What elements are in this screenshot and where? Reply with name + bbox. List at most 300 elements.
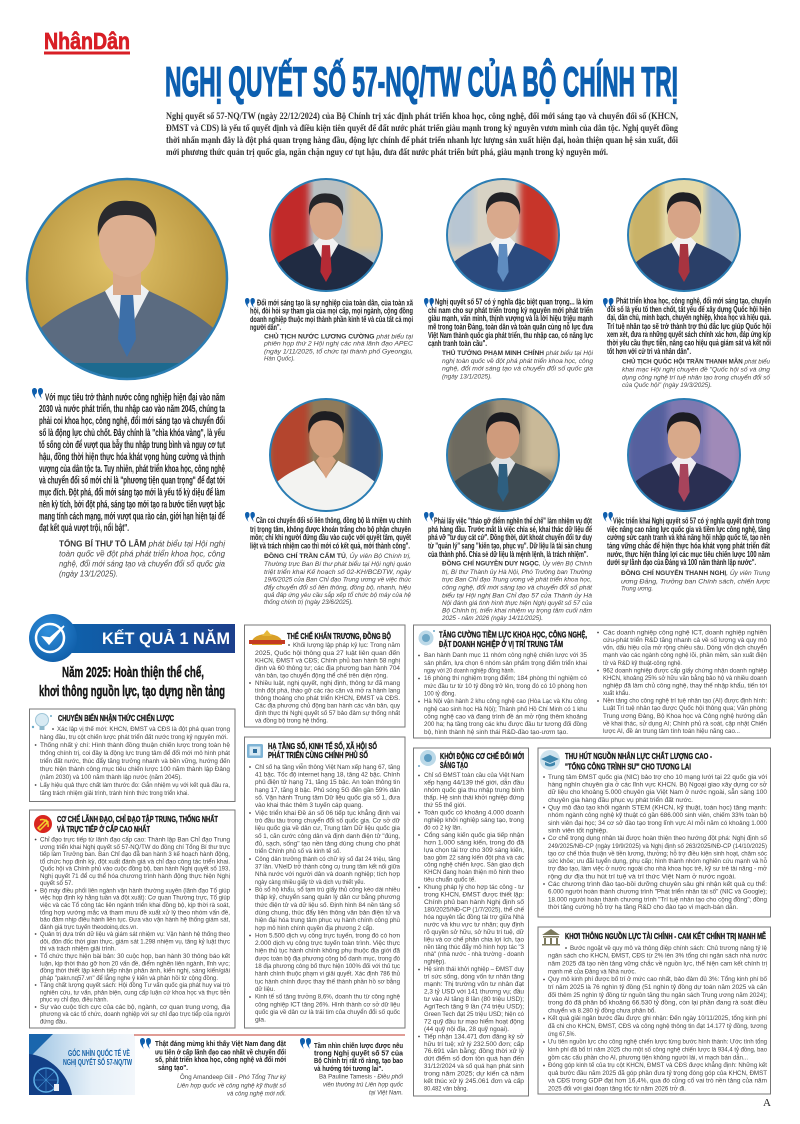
panel: science and technology potential: Ban hành Danh mục 11 nhóm công nghệ chiến lược với 35 <box>424 650 587 659</box>
panel: strategic awareness: thực hiện thành công mục tiêu chiến lược 100 năm thành lập Đảng <box>40 764 230 773</box>
quote: Nguyễn Duy Ngọc: Nội đánh giá tình hình thực hiện Nghị quyết số 57 của <box>442 599 592 607</box>
logo: Nhân Dân: NhânDân <box>44 28 130 54</box>
panel: innovation mechanism: xếp hạng 44/139 thế giới, dẫn đầu <box>424 778 524 787</box>
quote: Nguyễn Thanh Nghị: ĐỒNG CHÍ NGUYỄN THANH NGHỊ, Ủy viên Trung <box>621 567 770 577</box>
panel: innovation mechanism: KHCN đang hoàn thiện mô hình theo <box>424 869 524 876</box>
panel: financial resources: trí năm 2025 là 76 nghìn tỷ đồng (51 nghìn tỷ đồng dự toán năm 2025 và căn <box>548 982 767 991</box>
panel: innovation mechanism: nền tảng thúc đẩy mô hình hợp tác "3 <box>424 942 524 951</box>
panel: innovation mechanism: Hệ sinh thái khởi nghiệp – ĐMST duy <box>424 965 525 973</box>
quote: Tô Lâm: mục đích. Đột phá, đổi mới sáng tạo mới là yếu tố kỳ diệu để làm <box>39 487 225 499</box>
panel: innovation mechanism: 31/12/2024 và số quá hạn phát sinh <box>424 1061 524 1070</box>
panel: science and technology potential: 100 tỷ đồng. <box>424 689 456 698</box>
quote: Nguyễn Duy Ngọc: Phải lấy việc "tháo gỡ điểm nghẽn thể chế" làm nhiệm vụ đột <box>434 516 592 526</box>
quote: Trần Cẩm Tú: triệt triển khai Kế hoạch số 02-KH/BCĐTW, ngày <box>264 568 412 576</box>
quote: Amandeep Gill: Liên hợp quốc về công nghệ kỹ thuật số <box>177 1080 287 1089</box>
panel: innovation mechanism: hữu trí tuệ; xử lý 232.500 đơn; cấp <box>424 1039 524 1048</box>
panel: innovation mechanism: 2,3 tỷ USD với 141 thương vụ; đầu <box>424 986 524 996</box>
panel: digital infrastructure: thập kỷ, chuyển sang quản lý dân cư bằng phương <box>255 892 400 901</box>
panel: institutions <box>244 625 405 727</box>
panel: strategic awareness: CHUYỂN BIẾN NHẬN THỨC CHIẾN LƯỢC <box>58 712 174 723</box>
panel: institutions: THỂ CHẾ KHẨN TRƯƠNG, ĐỒNG BỘ <box>287 630 391 641</box>
panel: leadership mechanism: phương và các tổ chức, doanh nghiệp với sự chỉ đạo trực tiếp của người <box>40 1009 230 1018</box>
intro text: thời nhấn mạnh đây là đột phá quan trọng hàng đầu, động lực chính để phát triển nhanh lực lượng sản xuất hiện đại, hoàn thiện quan hệ sản xuất, đổi <box>166 135 678 146</box>
icon: gold drum emblem <box>249 630 285 645</box>
panel: digital infrastructure: công nghiệp ICT tăng 26%. Hình thành cơ sở dữ liệu <box>255 1000 400 1008</box>
quote: Nguyễn Duy Ngọc: 2025 - năm 2026 (ngày 14/11/2025). <box>441 615 543 622</box>
quote: Amandeep Gill: sáng tạo". <box>158 1063 188 1072</box>
panel: high-quality human resources: sức khỏe; ưu đãi tuyển dụng, phụ cấp; hình thành nhóm nghiên cứu mạnh và hỗ <box>548 856 767 865</box>
quote: Amandeep Gill: số, phát triển khoa học, công nghệ và đổi mới <box>155 1055 286 1064</box>
panel: digital infrastructure: gia. <box>255 1017 266 1024</box>
panel: digital infrastructure: dùng chung, thúc đẩy liên thông văn bản điện tử và <box>255 908 400 916</box>
panel: digital infrastructure: ngày càng nhiều giấy tờ và dịch vụ thiết yếu. <box>255 877 365 886</box>
panel: leadership mechanism: luận, kịp thời tháo gỡ hơn 20 vấn đề, điểm nghẽn liên ngành, lĩnh vực; <box>40 958 230 967</box>
panel: leadership mechanism: Quốc hội và Chính phủ vào cuộc đồng bộ, ban hành Nghị quyết số 193, <box>40 864 230 873</box>
quote: Trần Cẩm Tú: thống chính trị (ngày 23/6/2025). <box>264 598 353 606</box>
quote: Lương Cường: phiên họp thứ 2 Hội nghị các nhà lãnh đạo APEC <box>263 341 413 348</box>
panel: financial resources: năm 2025 đã tạo nền tảng vững chắc về nguồn lực, thể hiện cam kết chính trị <box>548 958 768 968</box>
panel: digital infrastructure: đủ, sạch, sống" tạo nền tảng dùng chung cho phát <box>255 838 400 848</box>
quote: Nguyễn Duy Ngọc: từ "quản lý" sang "kiến tạo, phục vụ". Dữ liệu là tài sản chung <box>428 542 592 550</box>
quote: Nguyễn Duy Ngọc <box>424 512 593 622</box>
panel: science and technology potential: ngay với 20 doanh nghiệp đồng hành. <box>424 666 515 674</box>
panel: financial resources: Kết quả giải ngân bước đầu được ghi nhận: Đến ngày 10/11/2025, tổng kinh phí <box>548 1013 767 1022</box>
panel: digital infrastructure: tục hành chính được thay thế thành phần hồ sơ bằng <box>255 976 400 985</box>
panel: science and technology potential: công nghệ cao và đang trình đề án mở rộng thêm khoảng <box>424 712 587 721</box>
panel: innovation mechanism: dứt điểm số đơn tồn quá hạn đến <box>424 1054 524 1063</box>
quote: Nguyễn Duy Ngọc: phá vỡ "tư duy cát cứ". Đồng thời, dứt khoát chuyển đổi tư duy <box>428 532 592 542</box>
panel: financial resources: 2025 đối với giai đoạn tăng tốc từ năm 2026 trở đi. <box>548 1084 686 1092</box>
panel: financial resources: ứng 67,5%. <box>548 1031 576 1038</box>
panel: leadership mechanism: VÀ TRỰC TIẾP Ở CẤP CAO NHẤT <box>57 823 150 834</box>
quote: Nguyễn Duy Ngọc: trị, Bí thư Thành ủy Hà Nội, Phó Trưởng ban Thường <box>442 568 592 576</box>
panel: science and technology potential: TĂNG CƯỜNG TIỀM LỰC KHOA HỌC, CÔNG NGHỆ, <box>439 628 587 640</box>
panel: strategic awareness <box>30 709 235 802</box>
quote: Phạm Minh Chính: cạnh tranh toàn cầu". <box>428 339 487 348</box>
panel: high-quality human resources: Các chương trình đào tạo-bồi dưỡng chuyên sâu ghi nhận kết quả cụ thể: <box>548 879 767 888</box>
panel: leadership mechanism: việc và các Tổ công tác liên ngành triển khai đồng bộ, kịp thời rà soát, <box>40 900 230 909</box>
panel: institutions: 2025, Quốc hội thông qua 27 luật liên quan đến <box>255 648 400 657</box>
panel: leadership mechanism: Tăng chất lượng quyết sách: Hội đồng Tư vấn quốc gia phát huy vai trò <box>40 980 230 989</box>
panel: financial resources: Bước ngoặt về quy mô và thông điệp chính sách: Chủ trương nâng tỷ lệ <box>570 943 767 952</box>
quote: Trần Thanh Mẫn: tốt hơn với cử tri và nhân dân". <box>607 347 691 356</box>
quote: Pauline Tamesis: Bộ Chính trị rất rõ ràng, tạo bao <box>314 1056 403 1065</box>
panel: science and technology potential: về khai thác, sử dụng AI; Chính phủ rà soát, cập nhật Chiến <box>603 718 767 727</box>
quote: Trần Thanh Mẫn: dụng công nghệ trí tuệ nhân tạo trong chuyển đổi số <box>622 373 771 381</box>
page letter: A <box>763 1097 771 1109</box>
icon: bank building <box>542 929 560 946</box>
panel: innovation mechanism: thứ 55 thế giới. <box>424 800 466 809</box>
panel: digital infrastructure: liệu quốc gia về dân cư, Trung tâm Dữ liệu quốc gia <box>255 823 400 832</box>
icon: quote mark <box>300 1038 311 1049</box>
panel: leadership mechanism: tổ chức họp định kỳ, đột xuất đánh giá và chỉ đạo công tác triển khai. <box>40 856 230 865</box>
panel: science and technology potential <box>414 625 770 738</box>
quote: Tô Lâm: vượng của dân tộc ta. Tuy nhiên, phát triển khoa học, công nghệ <box>39 463 225 475</box>
panel: science and technology potential: nghệ cao sinh học Hà Nội); Thành phố Hồ Chí Minh có 1 khu <box>424 704 587 713</box>
quote: Phạm Minh Chính: nghị toàn quốc về đột phá phát triển khoa học, công <box>442 356 593 365</box>
panel: science and technology potential: 200 ha; hạ tầng trong các khu được đầu tư tương đối đồng <box>424 719 587 728</box>
panel: high-quality human resources: Quy mô đào tạo khối ngành STEM (KHCN, kỹ thuật, toán học) tăng mạnh: <box>548 802 767 812</box>
panel: digital infrastructure: Hơn 5.500 dịch vụ công trực tuyến, trong đó có hơn <box>255 930 400 939</box>
panel: leadership mechanism: CƠ CHẾ LÃNH ĐẠO, CHỈ ĐẠO TẬP TRUNG, THỐNG NHẤT <box>57 813 219 824</box>
quote: Tô Lâm: nghệ, đổi mới sáng tạo và chuyển đổi số quốc gia <box>59 558 225 568</box>
panel: science and technology potential: mạnh vào các ngành công nghệ lõi, phần mềm, sản xuất điện <box>603 650 767 659</box>
panel: digital infrastructure: dữ liệu. <box>255 986 275 993</box>
panel: high-quality human resources: tạo cơ chế thỏa thuận về tiền lương, thưởng; hỗ trợ điều kiện sinh hoạt, chăm sóc <box>548 848 768 857</box>
panel: digital infrastructure: Kinh tế số tăng trưởng 8,6%, doanh thu từ công nghệ <box>255 992 400 1001</box>
quote: Lương Cường: người dân". <box>250 323 281 332</box>
panel: innovation mechanism: KHỞI ĐỘNG CƠ CHẾ ĐỔI MỚI <box>440 750 524 761</box>
panel: high-quality human resources: chuyên gia hàng đầu phục vụ phát triển đất nước. <box>548 795 693 804</box>
panel: strategic awareness: tăng trách nhiệm giải trình, tránh hình thức trong triển khai. <box>40 789 189 797</box>
quote: Nguyễn Duy Ngọc: biểu tại Hội nghị Ban Chỉ đạo 57 của Thành ủy Hà <box>442 591 592 599</box>
quote: Tô Lâm: (ngày 13/1/2025). <box>59 568 118 578</box>
quote: Lương Cường: (ngày 1/11/2025, tổ chức tại thành phố Gyeongju, <box>264 347 413 355</box>
panel: science and technology potential: sản phẩm, lựa chọn 6 nhóm sản phẩm trọng điểm triển khai <box>424 659 587 667</box>
quote: Tô Lâm: Với mục tiêu trở thành nước công nghiệp hiện đại vào năm <box>45 392 225 404</box>
panel: innovation mechanism: nước và khu vực tư nhân; quy định <box>424 921 524 928</box>
icon: innovation gear <box>418 750 436 767</box>
panel: strategic awareness: thống chính trị, coi đây là động lực trung tâm để đổi mới mô hình phát <box>40 748 230 757</box>
panel: science and technology potential: 16 phòng thí nghiệm trọng điểm; 184 phòng thí nghiệm có <box>424 674 587 682</box>
intro text: mới phương thức quản trị quốc gia, ngăn chặn nguy cơ tụt hậu, đưa đất nước phát triển bứt phá, giàu mạnh trong kỷ nguyên mới. <box>166 147 608 158</box>
icon: quote mark <box>603 298 613 308</box>
panel: financial resources: Quy mô kinh phí được bố trí ở mức cao nhất, bảo đảm đủ 3%: Tổng kinh phí bố <box>548 974 767 983</box>
icon: quote mark <box>245 298 255 308</box>
quote: Amandeep Gill: ưu tiên ở cấp lãnh đạo cao nhất về chuyển đổi <box>155 1047 286 1056</box>
quote: Trần Cẩm Tú <box>245 512 412 606</box>
quote: Tô Lâm: và chuyển đổi số mới chỉ là "phương tiện quan trọng" để đạt tới <box>39 475 225 487</box>
quote: Trần Cẩm Tú: 19/6/2025 của Ban Chỉ đạo Trung ương về việc thúc <box>264 575 412 584</box>
panel: high-quality human resources <box>538 748 770 917</box>
panel: financial resources: đối thêm 25 nghìn tỷ đồng từ nguồn tăng thu ngân sách Trung ương năm 2024); <box>548 990 767 999</box>
panel: innovation mechanism: đó có 2 kỳ lân. <box>424 824 462 831</box>
panel: high-quality human resources: hàng nghìn chuyên gia ở các lĩnh vực KHCN. Bộ Ngoại giao xây dựng cơ sở <box>548 781 768 789</box>
panel: innovation mechanism: trong năm 2025; dự kiến cả năm <box>424 1069 525 1078</box>
panel: digital infrastructure: hợp mô hình chính quyền địa phương 2 cấp. <box>255 923 374 932</box>
quote: Trần Cẩm Tú: Cần coi chuyển đổi số liên thông, đồng bộ là nhiệm vụ chính <box>256 515 411 525</box>
quote: Trần Cẩm Tú: liệt và trách nhiệm cao thì mới có kết quả, mới thành công". <box>250 542 410 550</box>
panel: digital infrastructure: số 1, căn cước công dân và định danh điện tử "đúng, <box>255 831 400 840</box>
icon: quote mark <box>424 512 434 522</box>
icon: digital screen <box>247 744 263 758</box>
panel: digital infrastructure: trò đầu tàu trong chuyển đổi số quốc gia. Cơ sở dữ <box>255 816 401 824</box>
panel: leadership mechanism: Tổ chức thực hiện bài bản: 30 cuộc họp, ban hành 30 thông báo kết <box>40 951 230 960</box>
panel: innovation mechanism: liệu và cơ chế phân chia lợi ích, tạo <box>424 934 524 943</box>
panel: digital infrastructure: HẠ TẦNG SỐ, KINH TẾ SỐ, XÃ HỘI SỐ <box>268 740 377 751</box>
quote: Nguyễn Duy Ngọc: phá hàng đầu. Trước mắt là việc chia sẻ, khai thác dữ liệu để <box>428 523 592 534</box>
panel: leadership mechanism: bảo đảm nhịp điều hành liên tục. Đưa vào vận hành hệ thống giám sát, <box>40 915 230 924</box>
quote: Trần Thanh Mẫn: của Quốc hội" (ngày 19/3/2025). <box>622 381 712 389</box>
panel: science and technology potential: Nền tảng cho công nghệ trí tuệ nhân tạo (AI) được định hình: <box>603 696 767 705</box>
quote: Trần Cẩm Tú: đẩy chuyển đổi số liên thông, đồng bộ, nhanh, hiệu <box>264 583 411 592</box>
quote: Tô Lâm: tố sống còn để vượt qua bẫy thu nhập trung bình và nguy cơ tụt <box>39 438 225 451</box>
panel: innovation mechanism: công nghệ chiến lược. Sàn giao dịch <box>424 860 524 869</box>
divider line <box>134 1034 405 1036</box>
panel: science and technology potential: bộ, hình thành hệ sinh thái R&D-đào tạo-ươm tạo. <box>424 729 568 736</box>
panel: leadership mechanism: đồng thời thiết lập kênh tiếp nhận phản ánh, kiến nghị, sáng kiến/giải <box>40 966 231 974</box>
panel: high-quality human resources: 18.000 người hoàn thành chương trình "Trí tuệ nhân tạo cho cộng đồng"; đồng <box>548 894 767 903</box>
panel: innovation mechanism: rõ quyền sở hữu, sở hữu trí tuệ, dữ <box>424 927 525 936</box>
quote: Pauline Tamesis: và hướng tới tương lai". <box>314 1064 383 1073</box>
icon: quote mark <box>32 388 43 399</box>
panel: leadership mechanism <box>30 810 235 1028</box>
panel: digital infrastructure: 41 bậc. Tốc độ internet hạng 18, tăng 42 bậc. Chính <box>255 770 400 779</box>
panel: digital infrastructure: thức điện tử và dữ liệu số. Định hình 84 nền tảng số <box>255 900 400 909</box>
quote: Phạm Minh Chính: Nghị quyết số 57 có ý nghĩa đặc biệt quan trọng... là kim <box>435 298 593 306</box>
panel: science and technology potential: Hà Nội vận hành 2 khu công nghệ cao (Hòa Lạc và Khu công <box>424 698 587 705</box>
quote: Trần Thanh Mẫn: CHỦ TỊCH QUỐC HỘI TRẦN THANH MẪN phát biểu <box>622 356 770 366</box>
panel: digital infrastructure: Chỉ số hạ tầng viễn thông Việt Nam xếp hạng 67, tăng <box>255 762 400 771</box>
panel: innovation mechanism: (44 quỹ nội địa, 28 quỹ ngoại). <box>424 1026 509 1033</box>
panel: financial resources: Đóng góp kinh tế của trụ cột KHCN, ĐMST và CĐS được khẳng định: Những kết <box>548 1060 767 1069</box>
quote: Lương Cường: doanh nghiệp thuộc mọi thành phần kinh tế và của tất cả mọi <box>250 315 413 324</box>
panel: innovation mechanism: nghiệp khởi nghiệp sáng tạo, trong <box>424 816 524 824</box>
panel: leadership mechanism: pháp "pakn.nq57.vn" để lắng nghe ý kiến và phản hồi từ cộng đồng. <box>40 973 218 982</box>
panel: digital infrastructure: Nhà nước với người dân và doanh nghiệp; tích hợp <box>255 871 400 878</box>
quote: Phạm Minh Chính: chỉ nam cho sự phát triển trong kỷ nguyên mới phát triển <box>428 305 593 315</box>
panel: digital infrastructure: PHÁT TRIỂN CÙNG CHÍNH PHỦ SỐ <box>268 749 368 760</box>
panel: institutions: văn bản, tạo chuyển động thể chế trên diện rộng. <box>255 670 388 679</box>
quote: Lương Cường <box>245 298 413 363</box>
panel: digital infrastructure: hiện thủ tục hành chính không phụ thuộc địa giới đã <box>255 947 400 955</box>
quote: Trần Cẩm Tú: ĐỒNG CHÍ TRẦN CẨM TÚ, Ủy viên Bộ Chính trị, <box>264 550 411 560</box>
portrait: Nguyễn Thanh Nghị <box>628 399 740 511</box>
panel: institutions: Khối lượng lập pháp kỷ lục: Trong năm <box>293 640 400 649</box>
quote: Tô Lâm: số là động lực chủ chốt. Đây chính là "chìa khóa vàng", là yếu <box>39 427 225 439</box>
panel: strategic awareness: Xác lập vị thế mới: KHCN, ĐMST và CĐS là đột phá quan trọng <box>57 724 230 733</box>
quote: Amandeep Gill <box>140 1038 287 1098</box>
panel: international view banner: NGHỊ QUYẾT SỐ 57-NQ/TW <box>63 1057 132 1067</box>
panel: innovation mechanism: mạnh: Thị trường vốn tư nhân đạt <box>424 979 524 988</box>
panel: institutions: Nhiều luật, nghị quyết, nghị định, thông tư đã mang <box>255 678 400 687</box>
panel: innovation mechanism: 76.691 văn bằng; đồng thời xử lý <box>424 1046 525 1055</box>
quote: Pauline Tamesis: trong Nghị quyết số 57 của <box>314 1048 404 1058</box>
panel: innovation mechanism: SÁNG TẠO <box>440 760 468 770</box>
quote: Phạm Minh Chính <box>424 298 593 380</box>
quote: Nguyễn Duy Ngọc: ĐỒNG CHÍ NGUYỄN DUY NGỌC, Ủy viên Bộ Chính <box>442 558 592 568</box>
quote: Phạm Minh Chính: mẽ trong toàn Đảng, toàn dân và toàn quân cùng nỗ lực đưa <box>428 322 593 332</box>
panel: leadership mechanism: dõi, đôn đốc thời gian thực, giám sát 1.298 nhiệm vụ, tăng kỷ luật thực <box>40 936 231 945</box>
panel: innovation mechanism: trong KHCN, ĐMST được thiết lập: <box>424 890 524 899</box>
panel: digital infrastructure: 2.000 dịch vụ công trực tuyến toàn trình. Việc thực <box>255 938 401 947</box>
panel: financial resources: ngân sách cho KHCN, ĐMST, CĐS từ 2% lên 3% tổng chi ngân sách nhà nước <box>548 952 768 960</box>
intro text: ĐMST và CDS) là yếu tố quyết định và điều kiện tiên quyết để đất nước phát triển giàu mạnh trong kỷ nguyên vươn mình của dân tộc. Nghị quyết đồng <box>166 123 678 134</box>
panel: leadership mechanism: quyết số 57. <box>40 878 73 887</box>
icon: light bulb <box>32 714 52 730</box>
panel: high-quality human resources: Cơ chế trọng dụng nhân tài được hoàn thiện theo hướng đột phá: Nghị định số <box>548 833 767 842</box>
panel: innovation mechanism: hóa nguyên tắc đồng tài trợ giữa Nhà <box>424 912 524 921</box>
panel: digital infrastructure: số. Vận hành Trung tâm Dữ liệu quốc gia số 1, đưa <box>255 792 400 802</box>
panel: innovation mechanism: nhóm quốc gia thu nhập trung bình <box>424 785 524 794</box>
panel: science and technology potential: Các doanh nghiệp công nghệ ICT, doanh nghiệp nghiên <box>603 630 767 636</box>
subheading: khơi thông nguồn lực, tạo dựng nền tảng <box>39 683 225 700</box>
quote: Nguyễn Thanh Nghị: ương Đảng, Trưởng ban Chính sách, chiến lược <box>621 577 771 585</box>
panel: science and technology potential: lược AI, đề án trung tâm tính toán hiệu năng cao... <box>603 726 740 735</box>
panel: high-quality human resources: trợ đào tạo, làm việc ở nước ngoài cho nhà khoa học trẻ, kỹ sư trẻ tài năng - mở <box>548 865 768 873</box>
panel: digital infrastructure: hạng 17, tăng 8 bậc. Phủ sóng 5G đến gần 59% dân <box>255 785 400 794</box>
subheading <box>39 664 225 700</box>
portrait: Trần Thanh Mẫn <box>628 179 740 291</box>
panel: digital infrastructure: hiện đại hóa trung tâm phục vụ hành chính công phù <box>255 917 400 924</box>
portrait: Lương Cường <box>270 179 382 291</box>
panel: innovation mechanism: AgriTech tăng 9 lần (74 triệu USD); <box>424 1002 524 1010</box>
icon: quote mark <box>603 512 613 522</box>
quote: Phạm Minh Chính: (ngày 13/1/2025). <box>442 373 492 380</box>
quote: Tô Lâm <box>32 388 226 578</box>
panel: high-quality human resources: Trung tâm ĐMST quốc gia (NIC) bảo trợ cho 10 mạng lưới tại 22 quốc gia với <box>548 772 768 781</box>
quote: Pauline Tamesis: tại Việt Nam. <box>369 1089 403 1096</box>
panel: high-quality human resources: 6.000 người hoàn thành chương trình "Phát triển nhân tài số" (NIC và Google); <box>548 887 767 896</box>
panel: high-quality human resources: 249/2025/NĐ-CP (ngày 19/9/2025) và Nghị định số 263/2025/NĐ-CP (14/10/2025) <box>548 841 767 850</box>
panel: leadership mechanism: thi và trách nhiệm giải trình. <box>40 946 116 953</box>
quote: Pauline Tamesis: Bà Pauline Tamesis - Điều phối <box>319 1072 403 1081</box>
quote: Trần Thanh Mẫn <box>603 296 771 389</box>
panel: leadership mechanism: việc họp định kỳ hằng tuần và đột xuất): Cơ quan Thường trực, Tổ giúp <box>40 893 230 902</box>
panel: science and technology potential: xuất khẩu. <box>603 688 630 697</box>
panel: leadership mechanism: đánh giá trực tuyến theodoinq.dcs.vn. <box>40 922 138 931</box>
quote: Tô Lâm: hậu, đồng thời hiện thực hóa khát vọng hùng cường và thịnh <box>39 451 225 463</box>
panel: high-quality human resources: sinh viên tốt nghiệp. <box>548 826 608 834</box>
panel: strategic awareness: (năm 2030) và 100 năm thành lập nước (năm 2045). <box>40 774 182 781</box>
panel: international view banner: GÓC NHÌN QUỐC TẾ VỀ <box>68 1048 130 1058</box>
icon: graduation cap <box>540 750 560 770</box>
panel: innovation mechanism: thấp. Hệ sinh thái khởi nghiệp đứng <box>424 793 524 802</box>
panel: innovation mechanism: Cổng sáng kiến quốc gia tiếp nhận <box>424 830 524 839</box>
quote: Nguyễn Thanh Nghị: Trung ương. <box>621 586 653 593</box>
panel: innovation mechanism: nghiệp). <box>424 959 446 966</box>
quote: Tô Lâm: TỔNG BÍ THƯ TÔ LÂM phát biểu tại Hội nghị <box>59 538 226 548</box>
panel: high-quality human resources: "TỔNG CÔNG TRÌNH SƯ" CHO TƯƠNG LAI <box>565 760 691 772</box>
quote: Lương Cường: CHỦ TỊCH NƯỚC LƯƠNG CƯỜNG phát biểu tại <box>264 331 413 340</box>
quote: Pauline Tamesis <box>300 1038 404 1096</box>
panel: strategic awareness: Thống nhất ý chí: Hình thành đồng thuận chiến lược trong toàn hệ <box>40 740 230 749</box>
panel: financial resources: chuyển và 8.280 tỷ đồng chưa phân bổ. <box>548 1005 656 1014</box>
quote: Trần Cẩm Tú: quả đáp ứng yêu cầu sắp xếp tổ chức bộ máy của hệ <box>264 590 411 599</box>
panel: digital infrastructure: vào khai thác thêm 3 tuyến cáp quang. <box>255 800 363 809</box>
quote: Tô Lâm: mang tính cách mạng, mới vượt qua rào cản, giới hạn hiện tại để <box>39 510 225 522</box>
panel: digital infrastructure: 37 lần. VNeID trở thành công cụ trung tâm kết nối giữa <box>255 862 400 870</box>
panel: leadership mechanism: đứng đầu. <box>40 1016 67 1026</box>
quote: Tô Lâm: 2030 và nước phát triển, thu nhập cao vào năm 2045, chúng ta <box>39 403 225 415</box>
quote: Tô Lâm: toàn quốc về đột phá phát triển khoa học, công <box>59 548 225 558</box>
panel: innovation mechanism: tiêu chuẩn quốc tế. <box>424 875 476 884</box>
panel: science and technology potential: 962 doanh nghiệp được cấp giấy chứng nhận doanh nghiệp <box>603 665 767 674</box>
panel: high-quality human resources: sinh viên đại học; 34 cơ sở đào tạo trong lĩnh vực AI mỗi năm có khoảng 1.000 <box>548 818 767 827</box>
panel: financial resources: Ưu tiên nguồn lực cho công nghệ chiến lược từng bước hình thành: Ước tính tổng <box>548 1037 767 1046</box>
panel: innovation mechanism: Chính phủ ban hành Nghị định số <box>424 897 524 906</box>
intro text <box>166 111 678 158</box>
panel: digital infrastructure: Việc triển khai Đề án số 06 tiếp tục khẳng định vai <box>255 808 401 817</box>
panel: leadership mechanism: Chỉ đạo trực tiếp từ lãnh đạo cấp cao: Thành lập Ban Chỉ đạo Trung <box>40 834 230 844</box>
quote: Amandeep Gill: và công nghệ mới nổi. <box>227 1090 286 1098</box>
panel: science and technology potential: Trung ương Đảng, Bộ Khoa học và Công nghệ hướng dẫn <box>603 711 767 720</box>
panel: leadership mechanism: Quản trị dựa trên dữ liệu và giám sát nhiệm vụ: Vận hành hệ thống theo <box>40 929 230 938</box>
panel: innovation mechanism: 80.482 văn bằng. <box>424 1084 468 1092</box>
panel: leadership mechanism: Sự vào cuộc tích cực của các bộ, ngành, cơ quan trung ương, địa <box>40 1003 230 1011</box>
panel: science and technology potential: Luật Trí tuệ nhân tạo được Quốc hội thông qua; Văn phòng <box>603 703 767 712</box>
panel: high-quality human resources: thời tăng cường hỗ trợ hạ tầng R&D cho đào tạo vi mạch-bán dẫn. <box>548 902 738 911</box>
panel: financial resources: quả bước đầu năm 2025 đã góp phần đưa tỷ trọng đóng góp của KHCN, ĐMST <box>548 1068 767 1077</box>
quote: Nguyễn Duy Ngọc: Bộ Chính trị, triển khai nhiệm vụ trọng tâm cuối năm <box>442 607 592 615</box>
panel: digital infrastructure: triển Chính phủ số và kinh tế số. <box>255 846 341 855</box>
panel: high-quality human resources: rộng dư địa thu hút trí tuệ và trí thức Việt Nam ở nước ngoài. <box>548 872 736 880</box>
panel: strategic awareness: triển đất nước, thúc đẩy tăng trưởng nhanh và bền vững, hướng đến <box>40 756 230 765</box>
panel: digital infrastructure <box>244 737 405 1028</box>
quote: Lương Cường: Hàn Quốc). <box>264 355 295 363</box>
icon: quote mark <box>245 512 255 522</box>
panel: science and technology potential: KHCN, khoảng 25% sở hữu văn bằng bảo hộ và nhiều doanh <box>603 673 767 682</box>
panel: high-quality human resources: dữ liệu cho khoảng 5.000 chuyên gia Việt Nam ở nước ngoài, sẵn sàng 100 <box>548 787 767 796</box>
panel: financial resources: trong đó đã phân bổ khoảng 66.530 tỷ đồng, còn lại phần đang rà soát điều <box>548 998 767 1007</box>
icon: quote mark <box>140 1038 151 1049</box>
panel: leadership mechanism: ương triển khai Nghị quyết số 57-NQ/TW do đồng chí Tổng Bí thư trực <box>40 842 231 851</box>
panel: strategic awareness: hàng đầu, trụ cột chiến lược phát triển đất nước trong kỷ nguyên mới. <box>40 732 228 741</box>
panel: innovation mechanism: nhà" (nhà nước - nhà trường - doanh <box>424 951 524 958</box>
quote: Nguyễn Duy Ngọc: công nghệ, đổi mới sáng tạo và chuyển đổi số phát <box>442 584 593 592</box>
panel: digital infrastructure: Công dân trưởng thành có chữ ký số đạt 24 triệu, tăng <box>255 854 400 863</box>
quote: Lương Cường: hội, đòi hỏi sự tham gia của mọi cấp, mọi ngành, cộng đồng <box>250 306 413 316</box>
intro text: Nghị quyết số 57-NQ/TW (ngày 22/12/2024) của Bộ Chính trị xác định phát triển khoa học, công nghệ, đổi mới sáng tạo và chuyển đổi số (KHCN, <box>166 111 678 122</box>
panel: digital infrastructure: hành chính thuộc phạm vi giải quyết. Xác định 786 thủ <box>255 969 400 978</box>
panel: innovation mechanism: 72 quỹ đầu tư mạo hiểm hoạt động <box>424 1016 524 1025</box>
panel: international view banner <box>29 1034 135 1095</box>
panel: leadership mechanism: Nghị quyết 71 để cụ thể hóa chương trình hành động thực hiện Nghị <box>40 871 230 880</box>
panel: institutions: tính đột phá, tháo gỡ các rào cản và mở ra hành lang <box>255 686 400 694</box>
portrait: Tô Lâm <box>27 179 227 383</box>
panel: innovation mechanism: Khung pháp lý cho hợp tác công - tư <box>424 884 525 891</box>
quote: Phạm Minh Chính: giàu mạnh, văn minh, thịnh vượng và là lời hiệu triệu mạnh <box>428 314 593 323</box>
panel: science and technology potential: nghiệp đã làm chủ công nghệ, thay thế nhập khẩu, tiến tới <box>603 680 768 690</box>
quote: Trần Cẩm Tú: môn; chỉ khi người đứng đầu vào cuộc với quyết tâm, quyết <box>250 533 411 542</box>
portrait: Phạm Minh Chính <box>447 179 559 291</box>
quote: Nguyễn Duy Ngọc: của thành phố. Chia sẻ dữ liệu là mệnh lệnh, là trách nhiệm". <box>428 550 588 559</box>
panel: institutions: KHCN, ĐMST và CĐS; Chính phủ ban hành 58 nghị <box>255 656 400 664</box>
panel: leadership mechanism: Bộ máy điều phối liên ngành vận hành thường xuyên (lãnh đạo Tổ giúp <box>40 886 230 894</box>
icon: check badge <box>29 614 77 662</box>
quote: Lương Cường: Đổi mới sáng tạo là sự nghiệp của toàn dân, của toàn xã <box>257 298 413 308</box>
panel: science and technology potential: vốn, dấu hiệu của mở rộng chiều sâu. Dòng vốn dịch chuyển <box>603 643 767 652</box>
panel: strategic awareness: Lấy hiệu quả thực chất làm thước đo: Gắn nhiệm vụ với kết quả đầu ra, <box>40 780 230 789</box>
quote: Amandeep Gill: Ông Amandeep Gill - Phó Tổng Thư ký <box>180 1072 287 1081</box>
portrait: Trần Cẩm Tú <box>270 399 382 511</box>
panel: science and technology potential: ĐẶT DOANH NGHIỆP Ở VỊ TRÍ TRUNG TÂM <box>439 638 563 649</box>
quote: Amandeep Gill: Thật đáng mừng khi thấy Việt Nam đang đặt <box>155 1039 287 1048</box>
panel: innovation mechanism: Green Tech đạt 25 triệu USD; hiện có <box>424 1011 524 1018</box>
quote: Trần Cẩm Tú: trị trọng tâm, không được khoán trắng cho bộ phận chuyên <box>250 523 411 534</box>
panel: innovation mechanism: kết thúc xử lý 245.061 đơn và cấp <box>424 1076 524 1085</box>
panel: digital infrastructure: quốc gia về dân cư là trái tim của chuyển đổi số quốc <box>255 1007 401 1016</box>
panel: innovation mechanism: bao gồm 22 sáng kiến đột phá và các <box>424 852 525 861</box>
panel: financial resources: và CĐS trong GDP đạt hơn 16,4%, qua đó củng cố vai trò nền tảng của năm <box>548 1076 767 1085</box>
quote: Pauline Tamesis: Tầm nhìn chiến lược được nêu <box>314 1041 403 1050</box>
panel: digital infrastructure: 18 địa phương công bố thực hiện 100% đối với thủ tục <box>255 961 401 970</box>
panel: innovation mechanism: lựa chọn tài trợ cho 309 sáng kiến, <box>424 845 524 854</box>
panel: innovation mechanism: 180/2025/NĐ-CP (1/7/2025), thể chế <box>424 904 524 914</box>
panel: innovation mechanism: tư vào AI tăng 8 lần (80 triệu USD); <box>424 994 524 1003</box>
quote: Tô Lâm: nên kỳ tích, bởi đột phá, sáng tạo mới tạo ra bước tiến vượt bậc <box>39 498 225 510</box>
portrait: Nguyễn Duy Ngọc <box>447 399 559 511</box>
panel: science and technology potential: tử và R&D kỹ thuật-công nghệ. <box>603 659 682 667</box>
panel: financial resources: mạnh mẽ của Đảng và Nhà nước. <box>548 967 636 975</box>
panel: financial resources: kinh phí đã bố trí năm 2025 cho một số công nghệ chiến lược là 934,4 tỷ đồng, bao <box>548 1044 767 1053</box>
panel: institutions: Các địa phương chủ động ban hành các văn bản, quy <box>255 702 401 710</box>
quote: Tô Lâm: phải coi khoa học, công nghệ, đổi mới sáng tạo và chuyển đổi <box>39 415 225 427</box>
panel: digital infrastructure: Bỏ sổ hộ khẩu, sổ tạm trú giấy thủ công kéo dài nhiều <box>255 884 400 894</box>
panel: science and technology potential: cứu-phát triển R&D tăng nhanh cả về số lượng và quy mô <box>603 635 767 644</box>
panel: high-quality human resources: THU HÚT NGUỒN NHÂN LỰC CHẤT LƯỢNG CAO - <box>565 750 712 761</box>
panel: innovation mechanism: Chỉ số ĐMST toàn cầu của Việt Nam <box>424 770 524 779</box>
